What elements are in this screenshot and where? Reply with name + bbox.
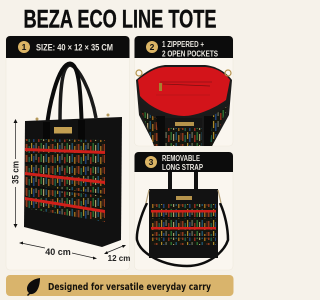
panel 1 header xyxy=(6,36,130,58)
open bag interior xyxy=(136,65,232,146)
bottom banner xyxy=(6,275,234,296)
dimension: 12 cm: 12 cm xyxy=(108,254,130,263)
dimension: 35 cm: 35 cm xyxy=(10,161,20,184)
panel 2 header: 2 xyxy=(150,42,155,52)
panel 3 header: 3 xyxy=(149,157,154,167)
infographic xyxy=(6,6,234,296)
panel 3 header xyxy=(134,152,233,172)
panel 1 header: 1 xyxy=(22,42,27,52)
panel 1 header: SIZE: 40 × 12 × 35 CM xyxy=(36,42,113,54)
tote bag large xyxy=(24,64,122,247)
background xyxy=(0,0,240,300)
dimension: 40 cm xyxy=(19,242,97,260)
dimension: 40 cm: 40 cm xyxy=(45,247,71,257)
panel 3: strap xyxy=(134,152,233,270)
dimension: 12 cm xyxy=(104,245,130,263)
panel 3 header: LONG STRAP xyxy=(162,163,204,172)
panel 2 header: 2 OPEN POCKETS xyxy=(162,50,219,58)
panel 2: pockets xyxy=(134,36,233,146)
panel 2 header: 1 ZIPPERED + xyxy=(162,40,204,49)
panel 3 header: REMOVABLE xyxy=(162,154,200,163)
icon: leaf xyxy=(27,278,40,296)
tote with long strap xyxy=(137,172,228,266)
dimension: 35 cm xyxy=(10,119,20,228)
panel 2 header xyxy=(134,36,233,58)
panel 1: size xyxy=(6,36,130,270)
